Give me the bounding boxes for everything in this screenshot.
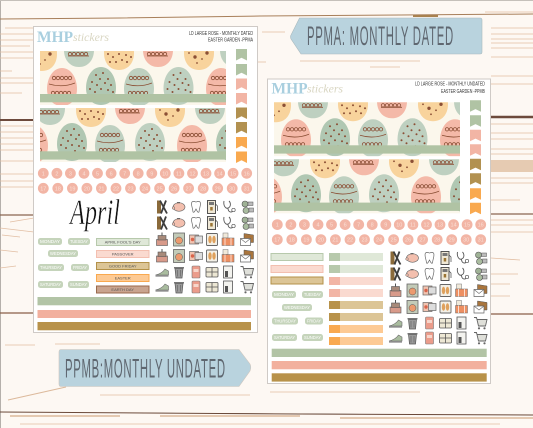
date circles: 12 (423, 223, 430, 229)
date circles: 29 (215, 186, 221, 192)
flag stickers (236, 49, 247, 163)
weekday labels: SATURDAY (40, 282, 61, 287)
date circles: 20 (84, 186, 90, 192)
banner: PPMB monthly undated (59, 350, 251, 386)
sheet title: EASTER GARDEN -PPMA (208, 38, 253, 44)
banner: PPMA monthly dated (290, 18, 482, 54)
date circles: 23 (127, 186, 134, 192)
date circles: 23 (361, 238, 368, 244)
date circles: 10 (162, 171, 168, 177)
date circles (272, 219, 486, 245)
full-width bars (272, 349, 487, 382)
weekday labels: FRIDAY (73, 265, 87, 270)
weekday labels (38, 238, 90, 288)
date circles: 22 (347, 238, 353, 244)
date circles: 28 (434, 238, 440, 244)
weekday labels: SUNDAY (304, 335, 321, 340)
date circles: 5 (96, 171, 99, 177)
weekday labels: SATURDAY (274, 335, 295, 340)
date circles: 14 (451, 223, 457, 229)
date circles: 21 (98, 186, 104, 192)
date circles: 24 (376, 238, 382, 244)
egg pattern headers (252, 80, 484, 214)
logo: MHP (272, 80, 308, 98)
date circles: 3 (303, 223, 306, 229)
date circles: 31 (478, 238, 484, 244)
holiday labels: GOOD FRIDAY (109, 264, 137, 268)
holiday labels: PASSOVER (112, 252, 134, 256)
sheet title (415, 82, 485, 95)
date circles: 1 (276, 223, 279, 229)
panel: sticker sheet PPMB undated (252, 79, 490, 384)
date circles: 4 (82, 171, 86, 177)
date circles: 16 (478, 223, 484, 229)
weekday labels: SUNDAY (70, 282, 87, 287)
date circles: 11 (410, 223, 416, 229)
date circles: 15 (230, 171, 236, 177)
date circles: 19 (303, 238, 309, 244)
date circles: 3 (69, 171, 72, 177)
date circles: 9 (150, 171, 153, 177)
logo: stickers (73, 30, 109, 44)
date circles: 30 (229, 186, 235, 192)
holiday labels: APRIL FOOL'S DAY (105, 240, 141, 244)
date circles: 7 (123, 171, 126, 177)
logo (272, 80, 343, 98)
date circles: 19 (69, 186, 75, 192)
date circles: 9 (384, 223, 387, 229)
month script: April: April (69, 192, 120, 232)
date circles: 18 (55, 186, 61, 192)
date circles: 2 (289, 223, 292, 229)
date circles: 6 (110, 171, 113, 177)
date circles: 11 (176, 171, 182, 177)
weekday labels: WEDNESDAY (284, 305, 310, 310)
blank label stickers (271, 254, 323, 284)
date circles: 5 (330, 223, 333, 229)
date circles: 4 (316, 223, 320, 229)
tab stickers (329, 253, 383, 345)
icon stickers (389, 252, 487, 344)
weekday labels: TUESDAY (70, 239, 88, 244)
date circles: 30 (463, 238, 469, 244)
date circles: 20 (318, 238, 324, 244)
date circles: 17 (274, 238, 280, 244)
date circles: 24 (142, 186, 148, 192)
date circles: 16 (244, 171, 250, 177)
date circles: 8 (137, 171, 140, 177)
flag stickers (470, 100, 481, 214)
date circles: 10 (396, 223, 402, 229)
date circles: 26 (171, 186, 177, 192)
date circles: 13 (203, 171, 209, 177)
date circles: 2 (55, 171, 58, 177)
date circles: 6 (344, 223, 347, 229)
weekday labels: THURSDAY (40, 265, 62, 270)
holiday labels (96, 238, 149, 293)
date circles: 31 (244, 186, 250, 192)
date circles: 15 (464, 223, 470, 229)
panel: sticker sheet PPMA dated (18, 26, 258, 332)
sheet title: LD LARGE ROSE - MONTHLY DATED (189, 31, 253, 37)
date circles: 21 (332, 238, 338, 244)
weekday labels: WEDNESDAY (50, 251, 76, 256)
full-width bars (38, 297, 251, 330)
weekday labels: THURSDAY (274, 319, 296, 324)
weekday labels: MONDAY (40, 239, 60, 244)
weekday labels (272, 291, 323, 341)
date circles (38, 168, 252, 194)
weekday labels: MONDAY (274, 292, 294, 297)
date circles: 26 (405, 238, 411, 244)
date circles: 13 (437, 223, 443, 229)
date circles: 27 (420, 238, 426, 244)
date circles: 27 (186, 186, 192, 192)
date circles: 29 (449, 238, 455, 244)
egg pattern headers (18, 29, 250, 163)
date circles: 17 (40, 186, 46, 192)
date circles: 14 (217, 171, 223, 177)
banner: PPMA monthly dated: PPMA: MONTHLY DATED (307, 22, 453, 52)
sheet title: LD LARGE ROSE - MONTHLY UNDATED (415, 82, 485, 88)
date circles: 12 (189, 171, 196, 177)
weekday labels: TUESDAY (304, 292, 321, 297)
date circles: 7 (357, 223, 360, 229)
date circles: 28 (200, 186, 206, 192)
date circles: 8 (371, 223, 374, 229)
sheet title (189, 31, 253, 44)
weekday labels: FRIDAY (307, 319, 321, 324)
banner: PPMB monthly undated: PPMB:MONTHLY UNDATED (65, 354, 225, 384)
logo (37, 29, 109, 46)
holiday labels: EASTER (115, 276, 131, 280)
logo: stickers (307, 82, 343, 96)
date circles: 18 (289, 238, 295, 244)
date circles: 25 (157, 186, 163, 192)
date circles: 22 (113, 186, 119, 192)
sheet title: EASTER GARDEN -PPMB (441, 89, 485, 95)
date circles: 25 (391, 238, 397, 244)
date circles: 1 (42, 171, 45, 177)
logo: MHP (37, 29, 74, 46)
holiday labels: EARTH DAY (111, 287, 134, 292)
icon stickers (156, 200, 254, 293)
